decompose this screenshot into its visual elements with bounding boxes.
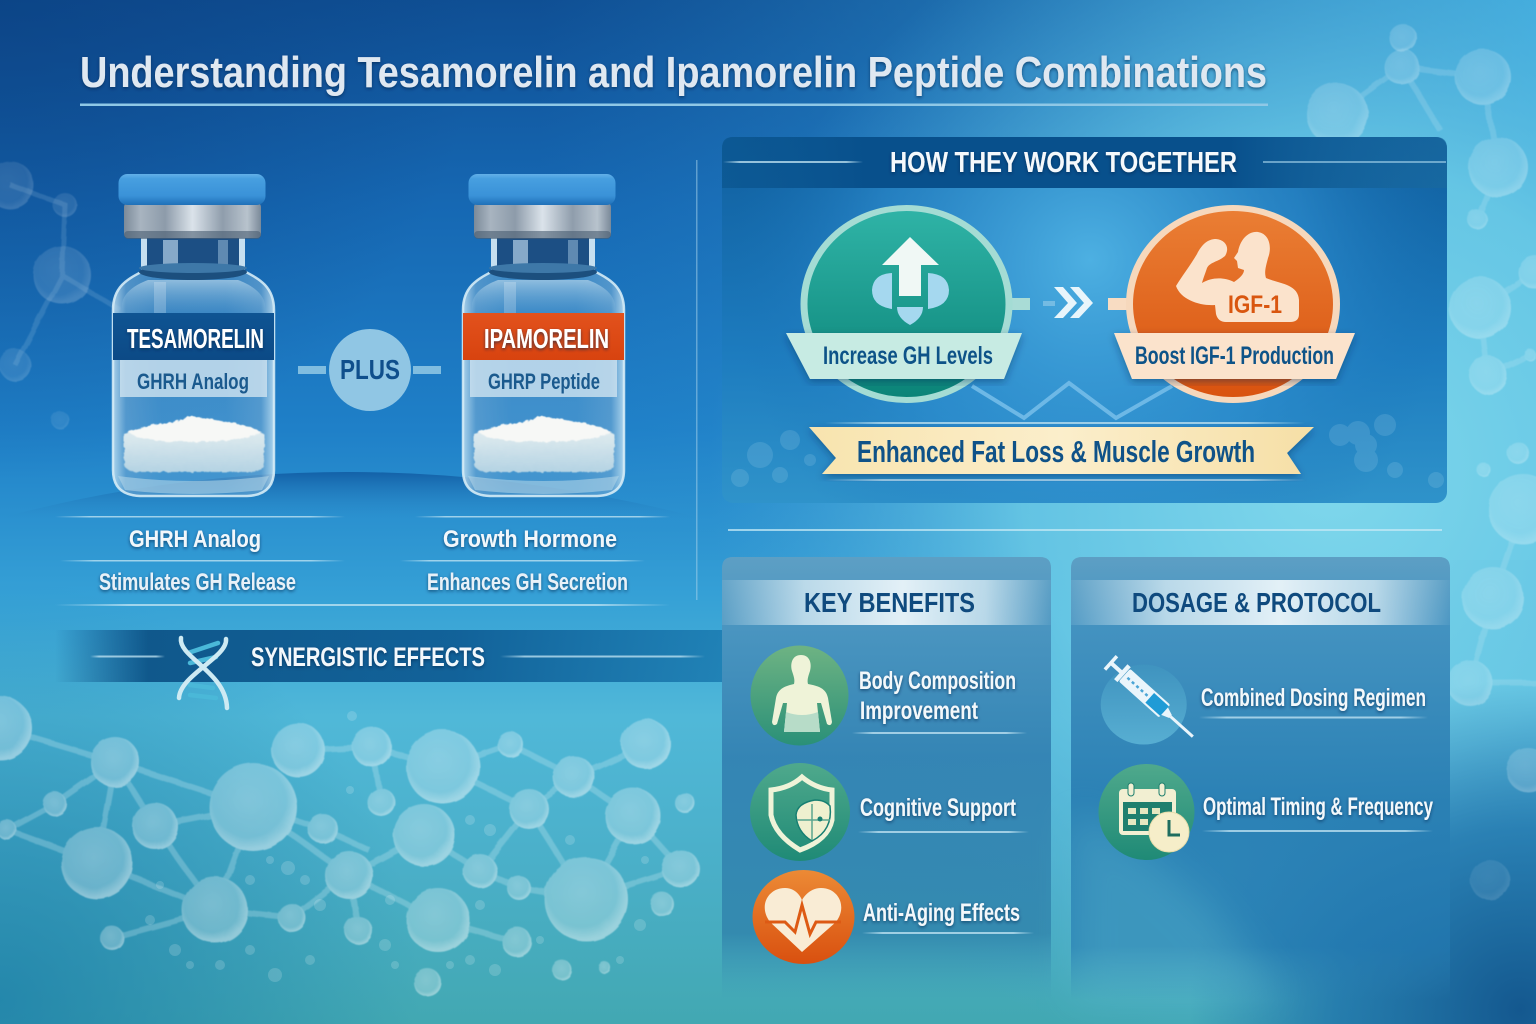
icon: shield with brain	[750, 763, 850, 861]
left description rows	[55, 516, 670, 606]
decorative molecules	[731, 414, 1444, 488]
icon: syringe	[1101, 654, 1200, 744]
panel: dosage and protocol	[1071, 557, 1450, 1000]
ribbon: boost igf-1 production	[1114, 333, 1355, 379]
text: ipamorelin action	[427, 526, 628, 596]
ribbon: increase gh levels: Increase GH Levels	[823, 342, 993, 370]
ribbon: boost igf-1 production: Boost IGF-1 Production	[1135, 342, 1334, 370]
protocol: combined dosing regimen	[1101, 654, 1428, 744]
heading: how they work together: HOW THEY WORK TOGETHER	[890, 147, 1237, 179]
benefit: anti-aging effects	[752, 870, 1034, 964]
label: tesamorelin	[113, 313, 274, 397]
synergistic effects band: SYNERGISTIC EFFECTS	[251, 642, 485, 672]
label: ipamorelin: GHRP Peptide	[488, 369, 600, 394]
molecule network: lower left	[0, 696, 700, 996]
panel: how they work together	[722, 137, 1447, 503]
benefit: body composition	[750, 646, 1027, 746]
benefit: cognitive support	[750, 763, 1029, 861]
heading: dosage and protocol: DOSAGE & PROTOCOL	[1132, 587, 1381, 618]
benefit: cognitive support: Cognitive Support	[860, 794, 1016, 822]
heading: key benefits	[722, 580, 1051, 625]
heading: dosage and protocol	[1071, 580, 1450, 625]
benefit: body composition: Improvement	[860, 697, 979, 725]
icon: flexing figure	[1176, 232, 1299, 322]
stage under vials	[0, 472, 700, 518]
heading: key benefits: KEY BENEFITS	[804, 587, 975, 618]
text: ipamorelin action: Enhances GH Secretion	[427, 569, 628, 596]
label: ipamorelin	[463, 313, 624, 397]
label: ipamorelin: IPAMORELIN	[484, 323, 609, 354]
label: tesamorelin: GHRH Analog	[137, 369, 249, 394]
icon: calendar and clock	[1098, 764, 1194, 860]
plus badge: PLUS	[340, 354, 400, 385]
panel: key benefits	[722, 557, 1051, 1000]
synergistic effects band	[55, 630, 722, 708]
vertical divider	[696, 160, 698, 600]
text: tesamorelin action: Stimulates GH Release	[99, 569, 296, 596]
benefit: body composition: Body Composition	[859, 667, 1016, 695]
step 1: increase gh levels	[786, 205, 1030, 403]
text: tesamorelin action: GHRH Analog	[129, 526, 261, 553]
banner: enhanced fat loss and muscle growth: Enhanced Fat Loss & Muscle Growth	[857, 434, 1255, 469]
benefit: anti-aging effects: Anti-Aging Effects	[863, 899, 1020, 927]
icon: heart with pulse	[752, 870, 854, 964]
vial: tesamorelin	[113, 174, 274, 496]
horizontal divider	[728, 529, 1442, 531]
vial: ipamorelin	[463, 174, 624, 496]
banner: enhanced fat loss and muscle growth	[809, 422, 1314, 481]
protocol: optimal timing and frequency	[1098, 764, 1433, 860]
zigzag connector	[972, 383, 1172, 418]
arrow: chevrons	[1043, 287, 1093, 318]
speckles around molecules	[145, 711, 649, 982]
text: ipamorelin action: Growth Hormone	[443, 526, 617, 553]
icon: body	[750, 646, 848, 746]
text: tesamorelin action	[99, 526, 296, 596]
step 2: boost igf-1 production	[1108, 205, 1355, 403]
icon: flexing figure: IGF-1	[1228, 291, 1282, 319]
icon: dna	[179, 638, 227, 708]
label: tesamorelin: TESAMORELIN	[127, 323, 264, 354]
ribbon: increase gh levels	[786, 333, 1022, 379]
title: Understanding Tesamorelin and Ipamorelin Peptide Combinations	[80, 48, 1267, 97]
protocol: combined dosing regimen: Combined Dosing Regimen	[1201, 684, 1426, 712]
icon: up arrow over cloud	[872, 237, 949, 325]
protocol: optimal timing and frequency: Optimal Timing & Frequency	[1203, 793, 1433, 821]
plus badge	[298, 329, 441, 411]
